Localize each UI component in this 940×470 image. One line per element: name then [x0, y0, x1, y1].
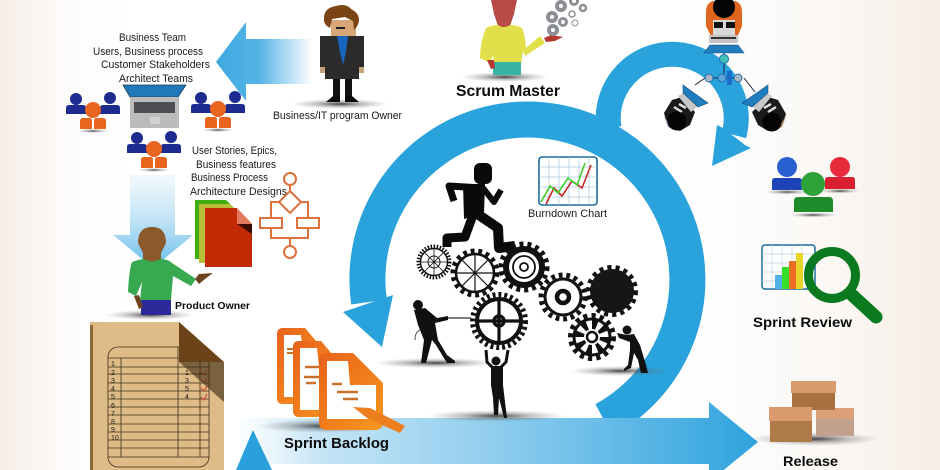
row numbers: 2: [111, 370, 115, 377]
icon: network nodes: [695, 53, 755, 92]
figure: developer top: [704, 0, 744, 53]
row numbers: 8: [111, 419, 115, 426]
team text: Users, Business process: [93, 46, 203, 58]
team text: Architect Teams: [119, 73, 193, 85]
figure: scrum master: [461, 0, 563, 82]
check marks: [201, 370, 207, 400]
artifacts text: [190, 145, 287, 198]
row numbers: 1: [185, 370, 189, 377]
gear 1: [418, 246, 450, 278]
row numbers: 5: [111, 394, 115, 401]
team text: [93, 32, 210, 85]
icon: sprint review chart and magnifier: [762, 245, 876, 317]
figure: pusher: [570, 326, 670, 376]
icon: release boxes: [750, 381, 880, 446]
icon: team right: [191, 91, 245, 132]
row numbers: 6: [111, 403, 115, 410]
row numbers: 4: [111, 386, 115, 393]
row numbers: 7: [111, 411, 115, 418]
large sprint cycle arrow: [343, 120, 687, 420]
row numbers: 9: [111, 427, 115, 434]
icon: laptop: [123, 85, 186, 128]
label: release: Release: [783, 453, 838, 469]
team text: Business Team: [119, 32, 186, 44]
product backlog document: [90, 322, 224, 470]
label: product owner: Product Owner: [175, 300, 250, 312]
row numbers: 1: [111, 361, 115, 368]
label: sprint backlog: Sprint Backlog: [284, 435, 389, 452]
team text: Customer Stakeholders: [101, 59, 210, 71]
gear 7: [472, 294, 526, 348]
gears: [418, 244, 636, 358]
row numbers: [111, 361, 189, 442]
artifacts text: Business features: [196, 159, 276, 171]
icon: team below: [127, 131, 181, 172]
label: scrum master: Scrum Master: [456, 83, 560, 100]
icon: sprint backlog documents: [257, 328, 405, 433]
artifacts text: Business Process: [191, 172, 268, 184]
row numbers: 3: [185, 378, 189, 385]
gear 4: [541, 275, 585, 319]
row numbers: 10: [111, 435, 119, 442]
row numbers: 5: [185, 386, 189, 393]
icon: small gears: [548, 0, 586, 34]
gear 5: [588, 268, 636, 314]
label: burndown chart: Burndown Chart: [528, 208, 607, 220]
figure: developer left: [664, 85, 708, 131]
figure: developer right: [742, 85, 786, 132]
arrow: business team to product owner: [113, 175, 193, 268]
artifacts text: User Stories, Epics,: [192, 145, 277, 157]
figure: runner: [447, 163, 515, 248]
figure: business owner: [292, 5, 388, 109]
icon: team left: [66, 92, 120, 133]
gear 3: [501, 244, 547, 290]
gear 6: [570, 316, 614, 358]
figure: product owner: [106, 227, 213, 320]
artifacts text: Architecture Designs: [190, 186, 287, 198]
icon: burndown chart: [539, 157, 597, 205]
row numbers: 3: [111, 378, 115, 385]
figure: rope puller: [373, 300, 497, 368]
icon: stakeholders group: [765, 157, 860, 218]
label: sprint review: Sprint Review: [753, 314, 852, 330]
arrow: owner to business team: [216, 22, 312, 101]
figure: gear lifter: [426, 350, 566, 422]
row numbers: 4: [185, 394, 189, 401]
gear 2: [453, 251, 497, 295]
icon: documents stack: [195, 200, 252, 267]
small iteration loop arrow: [608, 54, 751, 166]
up arrow to backlog: [236, 430, 272, 470]
label: business owner: Business/IT program Owner: [273, 110, 402, 122]
table: [108, 347, 209, 467]
icon: flowchart: [260, 173, 319, 258]
release arrow: [240, 402, 758, 470]
page fold: [179, 362, 224, 402]
